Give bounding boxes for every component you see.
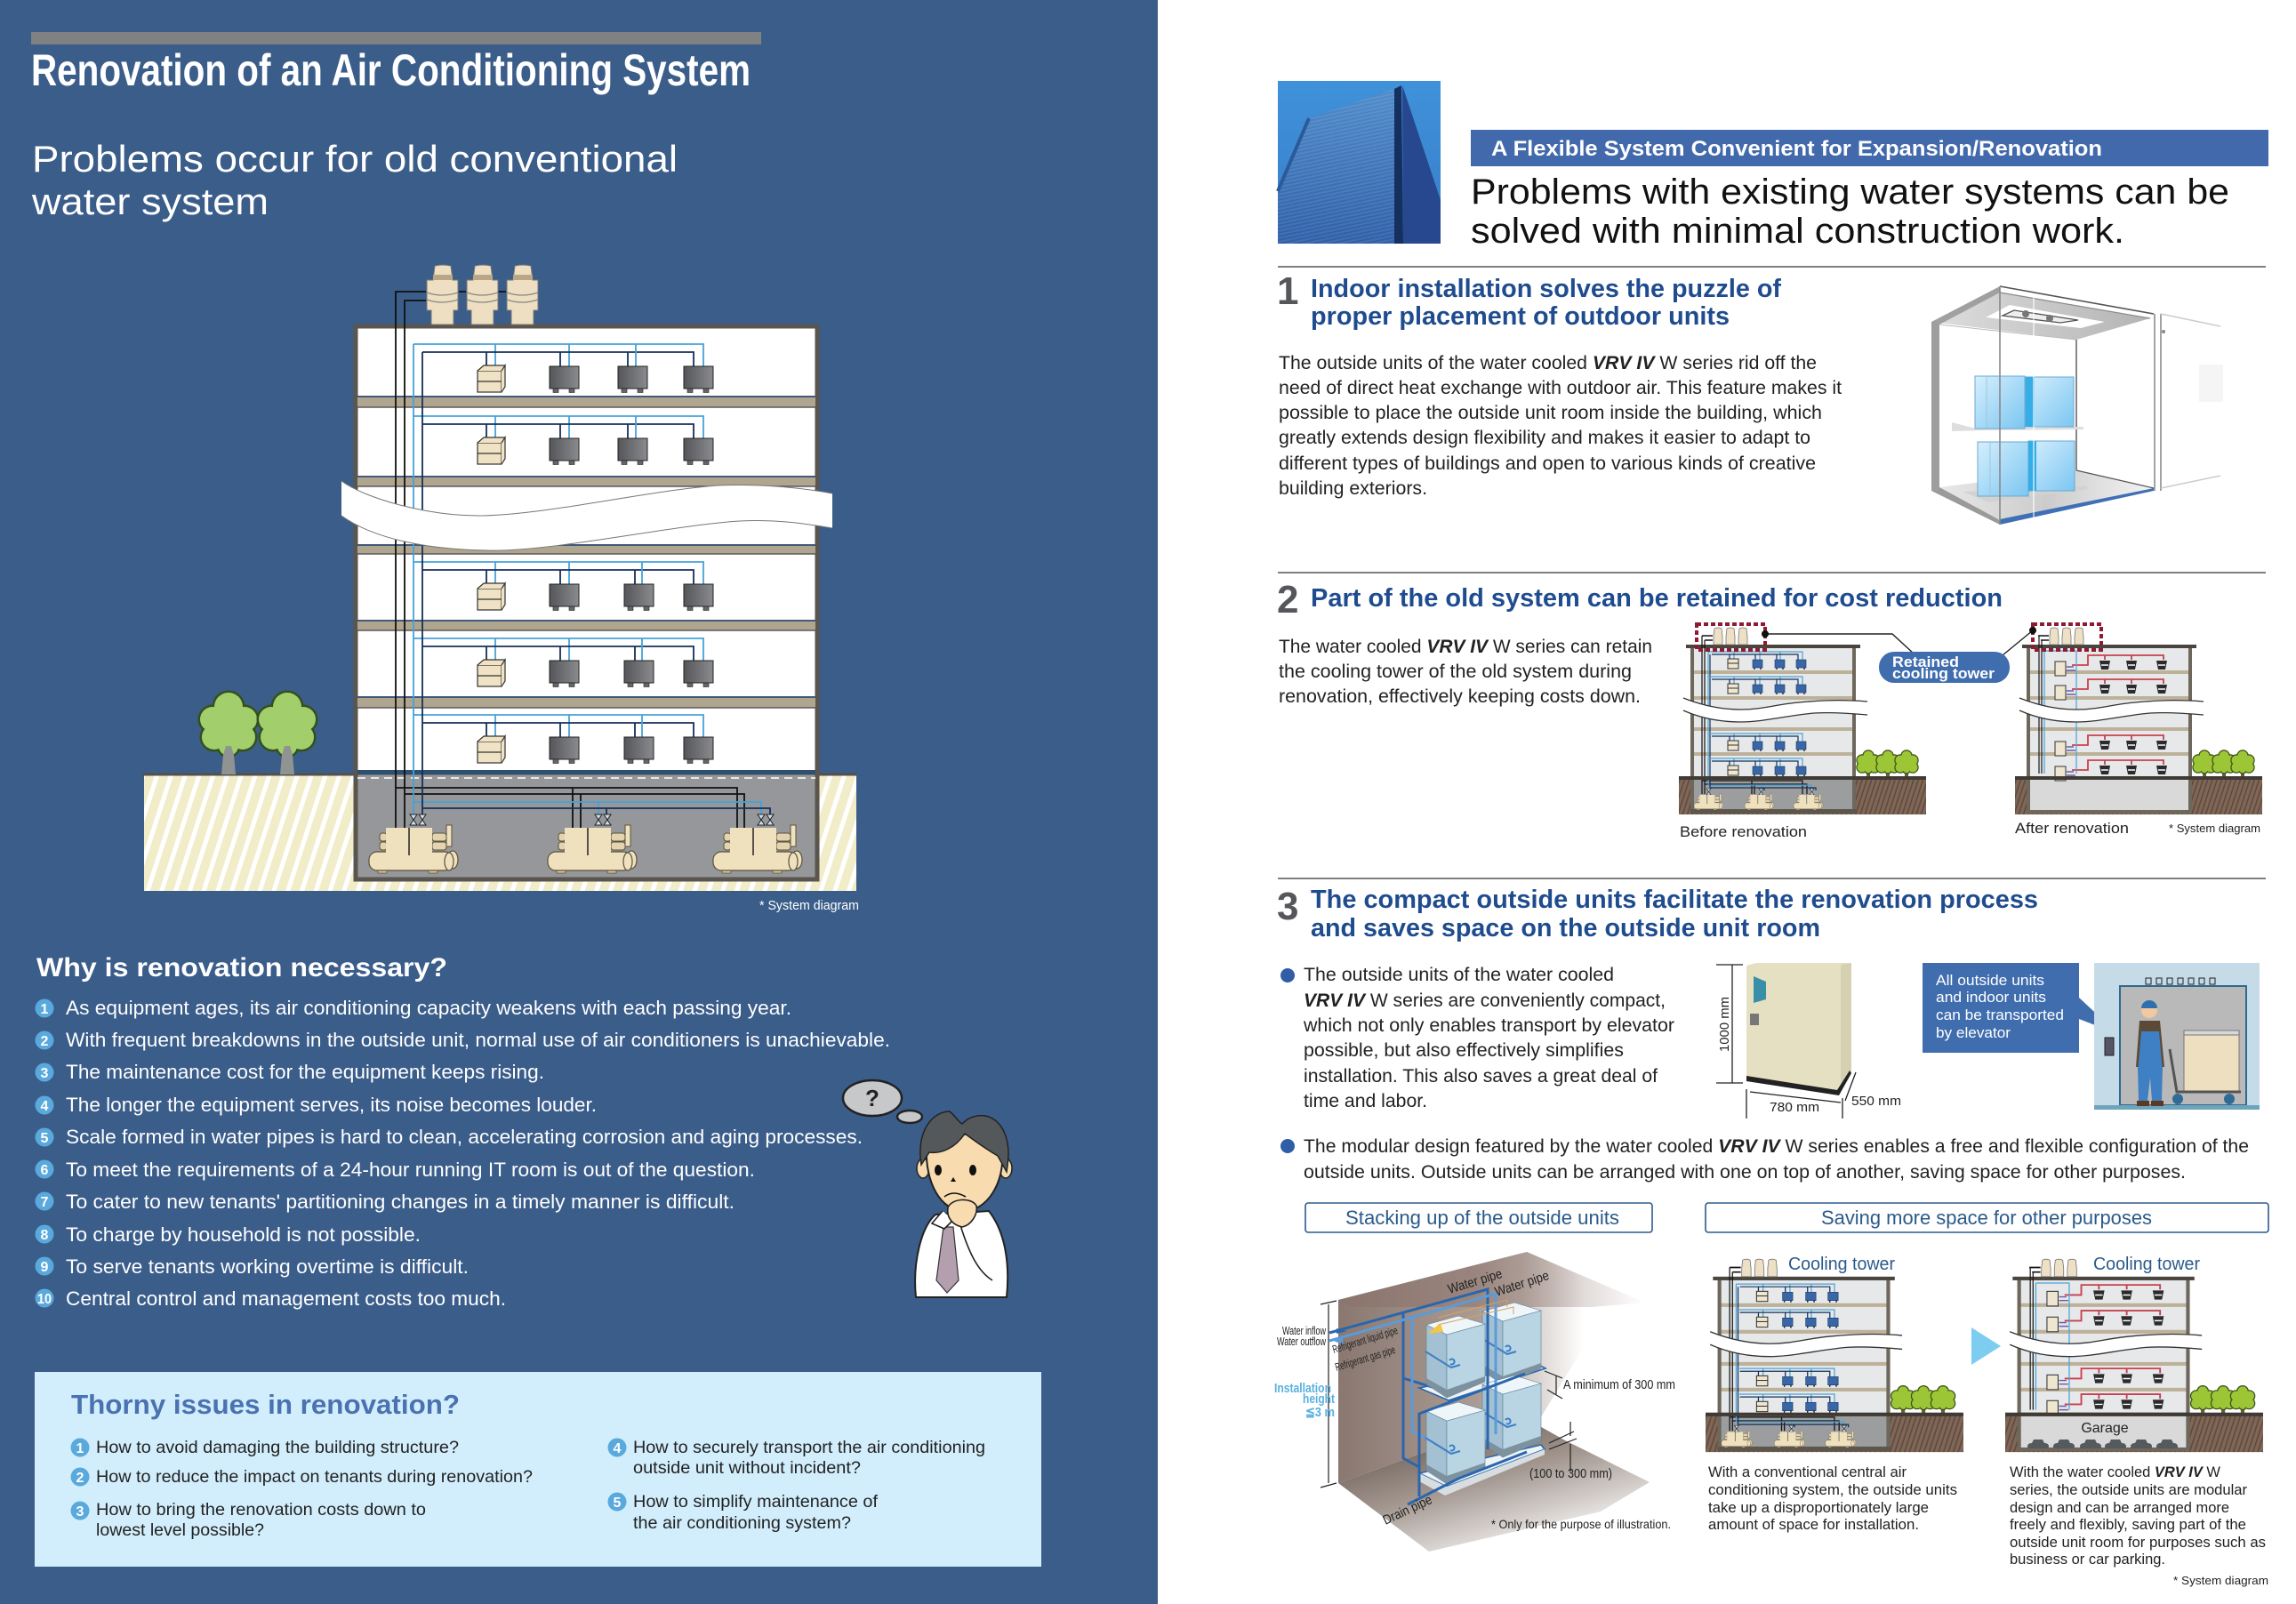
caption: conventional: take up a disproportionately large [1708,1500,1929,1516]
panel: thorny issues: How to securely transport the air conditioning [633,1438,985,1457]
garage label and cars [2027,1421,2178,1448]
basement room [356,770,817,879]
main heading right [1471,172,2229,251]
heading 1: proper placement of outdoor units [1311,302,1730,331]
panel: thorny issues: 3 [76,1504,84,1520]
thought bubble: ? [865,1085,879,1111]
title: Renovation of an Air Conditioning System [31,45,751,95]
pipe and dimension labels: * Only for the purpose of illustration. [1491,1517,1671,1531]
arrow [1971,1327,2001,1365]
illustration: outside unit dimensions [1716,963,1901,1119]
diagram: before renovation [1679,624,1926,814]
heading: why renovation: Why is renovation necessary? [36,953,447,982]
label: saving space: Saving more space for other purposes [1821,1207,2152,1229]
pipe and dimension labels [1274,1266,1675,1531]
illustration: outside unit dimensions: 1000 mm [1717,997,1732,1052]
label: stacking [1305,1203,1652,1232]
callout: elevator transport: by elevator [1936,1024,2011,1041]
section 2 [1277,578,2262,840]
pipe and dimension labels: ≦3 m [1305,1405,1335,1420]
caption: modular [2010,1464,2266,1568]
body 1 [1279,352,1842,499]
pipe and dimension labels: (100 to 300 mm) [1529,1467,1612,1481]
callout: retained cooling tower [1762,627,2036,683]
body 2: renovation, effectively keeping costs down. [1279,686,1641,707]
bullet text: compact units: which not only enables transport by elevator [1303,1015,1674,1036]
icon: thinking man [843,1080,1012,1297]
caption: modular: outside unit room for purposes such as [2010,1535,2266,1551]
illustration: stacked outside units [1274,1252,1675,1552]
caption: modular: design and can be arranged more [2010,1500,2229,1516]
number 1: 1 [1277,269,1298,313]
panel: thorny issues: How to reduce the impact on tenants during renovation? [96,1467,533,1487]
caption: modular: series, the outside units are modular [2010,1482,2247,1498]
bullet text: modular design [1280,1135,2249,1183]
body 2 [1279,636,1652,707]
pipe and dimension labels: Water pipe [1493,1268,1551,1300]
list: reasons: 8 [41,1228,49,1243]
building floors [356,326,817,774]
body 2: the cooling tower of the old system during [1279,661,1632,682]
heading: thorny issues: Thorny issues in renovation? [71,1389,460,1420]
panel: thorny issues: outside unit without incident? [633,1458,861,1478]
panel: thorny issues: 5 [614,1496,622,1511]
list: reasons: 4 [41,1099,49,1114]
garage label and cars: Garage [2081,1421,2129,1436]
captions: After renovation [2015,821,2129,837]
chillers and valves [369,814,802,873]
cooling towers [427,265,538,325]
trees [199,692,317,774]
label: cooling tower: Cooling tower [1788,1255,1895,1274]
bullet text: modular design: outside units. Outside units can be arranged with one on top of another, saving space for other purposes. [1304,1161,2186,1183]
panel: thorny issues [35,1372,1041,1567]
pipe and dimension labels: Water inflow [1282,1324,1326,1337]
list: reasons: 9 [41,1260,49,1275]
section 1 [1277,269,2223,525]
list: reasons: 6 [41,1163,49,1178]
list: reasons: 3 [41,1066,49,1081]
list: reasons: 2 [41,1034,49,1049]
caption: conventional: conditioning system, the outside units [1708,1482,1957,1498]
list: reasons: 5 [41,1131,49,1146]
callout: elevator transport: and indoor units [1936,989,2046,1006]
list: reasons [36,997,890,1310]
diagram: building with garage [2005,1259,2263,1452]
panel: thorny issues: lowest level possible? [96,1520,264,1540]
pipe and dimension labels: height [1303,1391,1335,1407]
pipe and dimension labels: Refrigerant liquid pipe [1331,1324,1400,1356]
caption: conventional: amount of space for installation. [1708,1517,1919,1533]
list: reasons: The maintenance cost for the equipment keeps rising. [66,1061,544,1083]
subtitle: water system [31,180,269,222]
body 1: greatly extends design flexibility and makes it easier to adapt to [1279,427,1810,448]
caption: conventional: With a conventional central air [1708,1464,1907,1480]
body 1: The outside units of the water cooled VRV IV W series rid off the [1279,352,1817,373]
list: reasons: 10 [37,1292,52,1307]
section 3 [1274,885,2268,1587]
body 1: building exteriors. [1279,477,1427,499]
list: reasons: To meet the requirements of a 24-hour running IT room is out of the question. [66,1159,755,1181]
diagram: after renovation [2015,624,2262,814]
pipes in front of units [1329,1289,1527,1504]
note: * System diagram [2173,1574,2268,1587]
subtitle [31,138,678,222]
thought bubble [843,1080,922,1123]
note: * System diagram [759,898,859,913]
pipe and dimension labels: Installation [1274,1381,1331,1396]
heading 1: Indoor installation solves the puzzle of [1311,275,1781,303]
main heading right: solved with minimal construction work. [1471,212,2124,251]
pipe and dimension labels: A minimum of 300 mm [1563,1378,1675,1392]
pipe and dimension labels: Refrigerant gas pipe [1334,1343,1397,1374]
banner: heading [1471,130,2268,166]
list: reasons: To serve tenants working overtime is difficult. [66,1255,469,1278]
heading 3 [1311,886,2038,942]
outside units [1975,376,2075,496]
label: saving space [1706,1203,2268,1232]
panel: thorny issues: How to simplify maintenance of [633,1492,879,1512]
callout: retained cooling tower: cooling tower [1892,665,1995,682]
pipe and dimension labels: Water outflow [1277,1335,1326,1348]
caption: conventional [1708,1464,1957,1533]
list: reasons: With frequent breakdowns in the outside unit, normal use of air conditioners is unachievable. [66,1029,890,1051]
bullet text: compact units: possible, but also effectively simplifies [1304,1039,1624,1061]
callout: elevator transport: can be transported [1936,1007,2064,1023]
panel: thorny issues: 2 [76,1471,84,1486]
bullet text: modular design: The modular design featured by the water cooled VRV IV W series enables a free and flexible configuration of the [1304,1135,2249,1157]
panel: thorny issues: 1 [76,1441,84,1456]
heading 3: and saves space on the outside unit room [1311,914,1820,942]
list: reasons: Scale formed in water pipes is hard to clean, accelerating corrosion and aging processes. [66,1126,863,1148]
bullet text: compact units: time and labor. [1304,1090,1427,1111]
list: reasons: As equipment ages, its air conditioning capacity weakens with each passing year. [66,997,791,1019]
pipe and dimension labels: Water pipe [1446,1266,1504,1297]
caption: modular: freely and flexibly, saving part of the [2010,1517,2246,1533]
bullet text: compact units [1280,964,1674,1111]
callout: elevator transport: All outside units [1936,972,2044,989]
callout: elevator transport [1923,963,2118,1053]
captions [1680,821,2260,840]
illustration: worker with unit at elevator [2094,963,2260,1110]
list: reasons: The longer the equipment serves, its noise becomes louder. [66,1094,597,1116]
shelves [1419,1365,1545,1496]
caption: modular: business or car parking. [2010,1552,2165,1568]
captions: Before renovation [1680,824,1807,840]
list: reasons: Central control and management costs too much. [66,1287,506,1310]
heading 2: Part of the old system can be retained for cost reduction [1311,584,2003,613]
list: reasons: To cater to new tenants' partitioning changes in a timely manner is difficult. [66,1191,735,1213]
break band [341,481,832,550]
indoor units and pipes per floor [413,344,713,763]
heading 1 [1311,275,1781,331]
label: cooling tower: Cooling tower [2093,1255,2200,1274]
title bar [31,32,761,44]
chart: old water system building diagram [142,265,859,913]
bullet text: compact units: VRV IV W series are conveniently compact, [1304,990,1666,1011]
list: reasons: To charge by household is not possible. [66,1223,421,1246]
number 3: 3 [1277,885,1298,928]
captions: * System diagram [2169,822,2260,835]
body 1: possible to place the outside unit room inside the building, which [1279,402,1822,423]
callout: retained cooling tower: Retained [1892,654,1959,670]
list: reasons: 7 [41,1195,49,1210]
main heading right: Problems with existing water systems can be [1471,172,2229,212]
panel: thorny issues: How to avoid damaging the building structure? [96,1438,459,1457]
body 2: The water cooled VRV IV W series can retain [1279,636,1652,657]
panel: thorny issues: How to bring the renovation costs down to [96,1500,426,1520]
caption: modular: With the water cooled VRV IV W [2010,1464,2220,1480]
bullet text: compact units: installation. This also saves a great deal of [1304,1065,1658,1087]
photo: skyscraper [1278,81,1441,244]
illustration: indoor machine room [1931,286,2223,525]
illustration: outside unit dimensions: 550 mm [1851,1094,1901,1109]
illustration: outside unit dimensions: 780 mm [1770,1100,1819,1115]
body 1: different types of buildings and open to various kinds of creative [1279,453,1816,474]
list: reasons: 1 [41,1002,49,1017]
label: stacking: Stacking up of the outside units [1345,1207,1619,1229]
heading 3: The compact outside units facilitate the renovation process [1311,886,2038,914]
banner: heading: A Flexible System Convenient for Expansion/Renovation [1491,137,2102,161]
panel: left blue background [0,0,1158,1604]
body 1: need of direct heat exchange with outdoor air. This feature makes it [1279,377,1842,398]
pipe and dimension labels: Drain pipe [1381,1492,1434,1528]
bullet text: compact units: The outside units of the water cooled [1304,964,1614,985]
pipes behind units [1403,1313,1456,1467]
main risers [396,292,770,828]
diagram: conventional building [1706,1259,1963,1452]
ground with hatch [142,774,856,891]
subtitle: Problems occur for old conventional [32,138,678,180]
panel: thorny issues: 4 [614,1441,622,1456]
panel: thorny issues: the air conditioning system? [633,1513,851,1533]
number 2: 2 [1277,578,1298,622]
